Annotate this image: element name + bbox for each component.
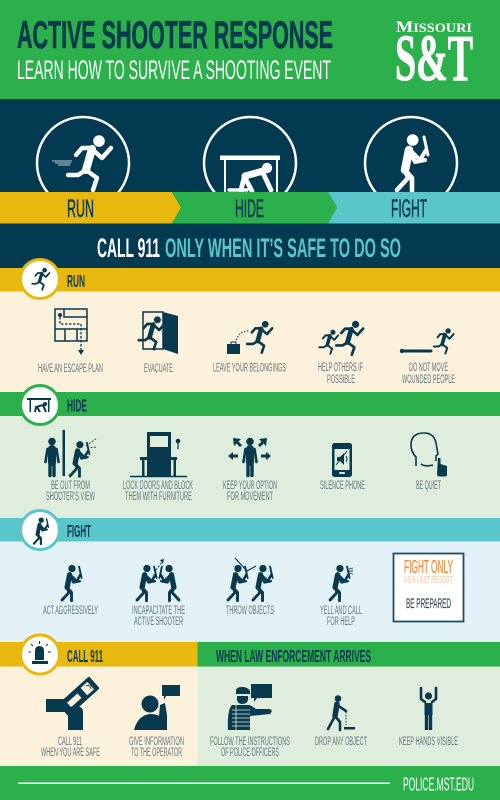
panel: fight: FIGHT bbox=[67, 521, 91, 541]
panel: run: RUN bbox=[67, 271, 85, 291]
item: yell and call: FOR HELP bbox=[327, 616, 355, 628]
ribbon: fight bbox=[328, 192, 500, 224]
item: evacuate: EVACUATE bbox=[144, 363, 173, 375]
item: leave belongings bbox=[213, 321, 286, 374]
panel: fight: INCAPACITATE THE bbox=[132, 605, 185, 617]
item: lock doors bbox=[123, 432, 193, 503]
item: give information bbox=[129, 685, 184, 759]
panel: call 911: GIVE INFORMATION bbox=[129, 736, 184, 748]
dark hero panel bbox=[0, 99, 500, 269]
panel: run: HAVE AN ESCAPE PLAN bbox=[38, 363, 103, 375]
item: out of view: SHOOTER’S VIEW bbox=[46, 491, 95, 503]
call 911 banner: CALL 911 bbox=[97, 233, 160, 263]
item: act aggressively bbox=[43, 565, 98, 617]
item: evacuate bbox=[139, 312, 178, 375]
item: keep hands visible bbox=[399, 688, 458, 748]
item: drop object bbox=[315, 695, 367, 748]
panel: call 911: WHEN YOU ARE SAFE bbox=[41, 747, 100, 759]
item: be quiet bbox=[411, 433, 447, 492]
item: incapacitate: ACTIVE SHOOTER bbox=[134, 616, 183, 628]
item: keep options: FOR MOVEMENT bbox=[227, 491, 273, 503]
footer bbox=[0, 766, 500, 800]
panel: hide bbox=[0, 386, 500, 518]
panel: fight: ACT AGGRESSIVELY bbox=[43, 605, 98, 617]
item: escape plan bbox=[38, 309, 103, 375]
item: do not move wounded: DO NOT MOVE bbox=[409, 362, 448, 374]
panel: hide: HIDE bbox=[67, 396, 87, 416]
panel: hide: KEEP YOUR OPTION bbox=[223, 480, 277, 492]
item: call 911 phone: CALL 911 bbox=[58, 736, 82, 748]
panel: fight: THROW OBJECTS bbox=[226, 605, 274, 617]
item: yell and call bbox=[320, 565, 362, 628]
icon: siren badge bbox=[20, 635, 60, 674]
icon: fight badge bbox=[20, 510, 60, 550]
callout: fight only: BE PREPARED bbox=[406, 596, 451, 611]
item: do not move wounded bbox=[400, 328, 455, 386]
logo: Missouri S&T: MISSOURI bbox=[396, 19, 472, 36]
icon: run circle bbox=[37, 117, 129, 209]
panel: call 911: CALL 911 bbox=[67, 646, 103, 666]
item: call 911 phone bbox=[41, 676, 100, 759]
item: be quiet: BE QUIET bbox=[416, 480, 441, 492]
ribbon: run: RUN bbox=[67, 195, 94, 223]
item: follow instructions bbox=[210, 684, 290, 759]
call 911 banner bbox=[97, 233, 401, 263]
panel: call 911 bbox=[0, 635, 198, 766]
panel: run: HELP OTHERS IF bbox=[318, 362, 363, 374]
panel: when law enforcement arrives: DROP ANY OBJECT bbox=[315, 736, 367, 748]
panel: fight: YELL AND CALL bbox=[320, 605, 362, 617]
icon: hide badge bbox=[20, 386, 60, 424]
panel: call 911: TO THE OPERATOR bbox=[131, 747, 182, 759]
panel: when law enforcement arrives: FOLLOW THE INSTRUCTIONS bbox=[210, 736, 290, 748]
panel: hide: SILENCE PHONE bbox=[320, 480, 365, 492]
item: out of view: BE OUT FROM bbox=[51, 480, 90, 492]
panel: when law enforcement arrives bbox=[198, 642, 500, 766]
icon: fight circle bbox=[365, 117, 457, 209]
callout: fight only: AS A LAST RESORT bbox=[404, 574, 453, 586]
panel: run: LEAVE YOUR BELONGINGS bbox=[213, 362, 286, 374]
item: keep options bbox=[223, 438, 277, 503]
item: help others: POSSIBLE bbox=[327, 374, 355, 386]
item: incapacitate bbox=[132, 559, 185, 628]
header band bbox=[0, 0, 500, 100]
panel: run bbox=[0, 260, 500, 392]
ribbon: hide bbox=[172, 192, 337, 224]
callout: fight only bbox=[394, 554, 464, 622]
item: silence phone bbox=[320, 443, 365, 492]
item: out of view bbox=[46, 430, 97, 503]
ribbon: run bbox=[0, 192, 181, 224]
item: throw objects bbox=[226, 558, 274, 617]
icon: hide circle bbox=[204, 117, 296, 209]
panel: hide: LOCK DOORS AND BLOCK bbox=[123, 480, 193, 492]
ribbon: fight: FIGHT bbox=[391, 195, 427, 223]
icon: run badge bbox=[20, 260, 60, 298]
item: lock doors: THEM WITH FURNITURE bbox=[125, 491, 192, 503]
item: follow instructions: OF POLICE OFFICERS bbox=[221, 747, 279, 759]
ribbon: hide: HIDE bbox=[235, 195, 264, 223]
panel: fight bbox=[0, 510, 500, 642]
item: help others bbox=[318, 321, 363, 386]
